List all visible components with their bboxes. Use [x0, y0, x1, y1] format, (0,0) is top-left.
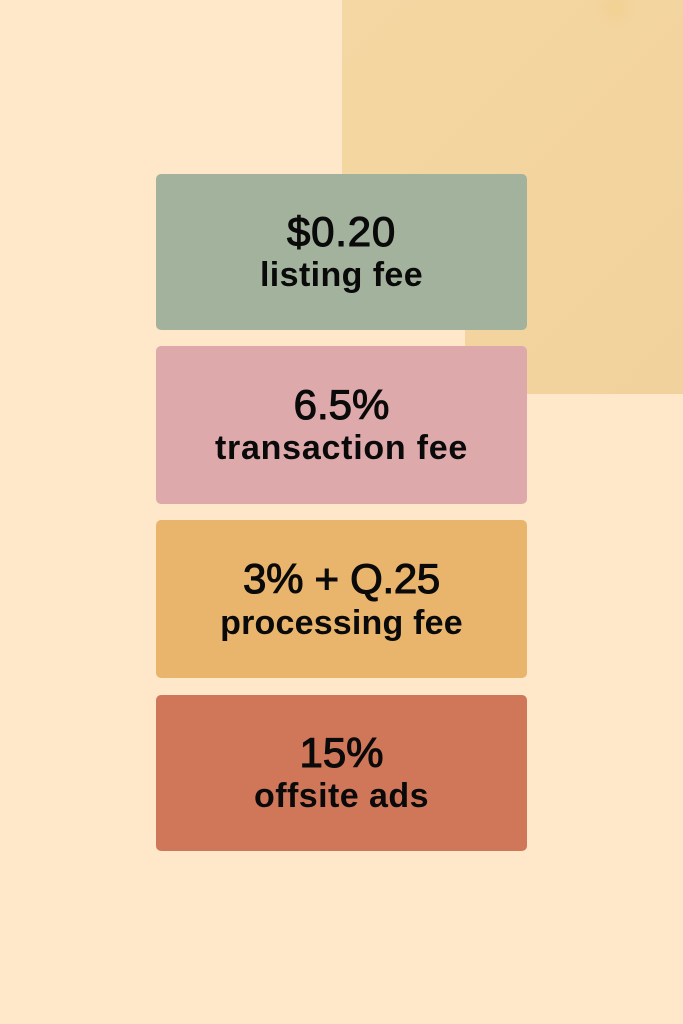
- card: transaction fee: [156, 346, 527, 504]
- value: 6.5%: 6.5%: [294, 381, 389, 428]
- card: listing fee: [156, 174, 527, 330]
- label: processing fee: processing fee: [220, 604, 463, 642]
- value: 15%: 15%: [299, 729, 384, 776]
- value: 3% + Q.25: 3% + Q.25: [243, 555, 440, 602]
- label: listing fee: listing fee: [260, 256, 423, 294]
- card: processing fee: [156, 520, 527, 678]
- label: transaction fee: transaction fee: [215, 429, 468, 467]
- card: offsite ads: [156, 695, 527, 851]
- card stack: [156, 174, 527, 851]
- label: offsite ads: offsite ads: [254, 777, 429, 815]
- background decorative panel: [342, 0, 683, 394]
- value: $0.20: $0.20: [287, 208, 396, 255]
